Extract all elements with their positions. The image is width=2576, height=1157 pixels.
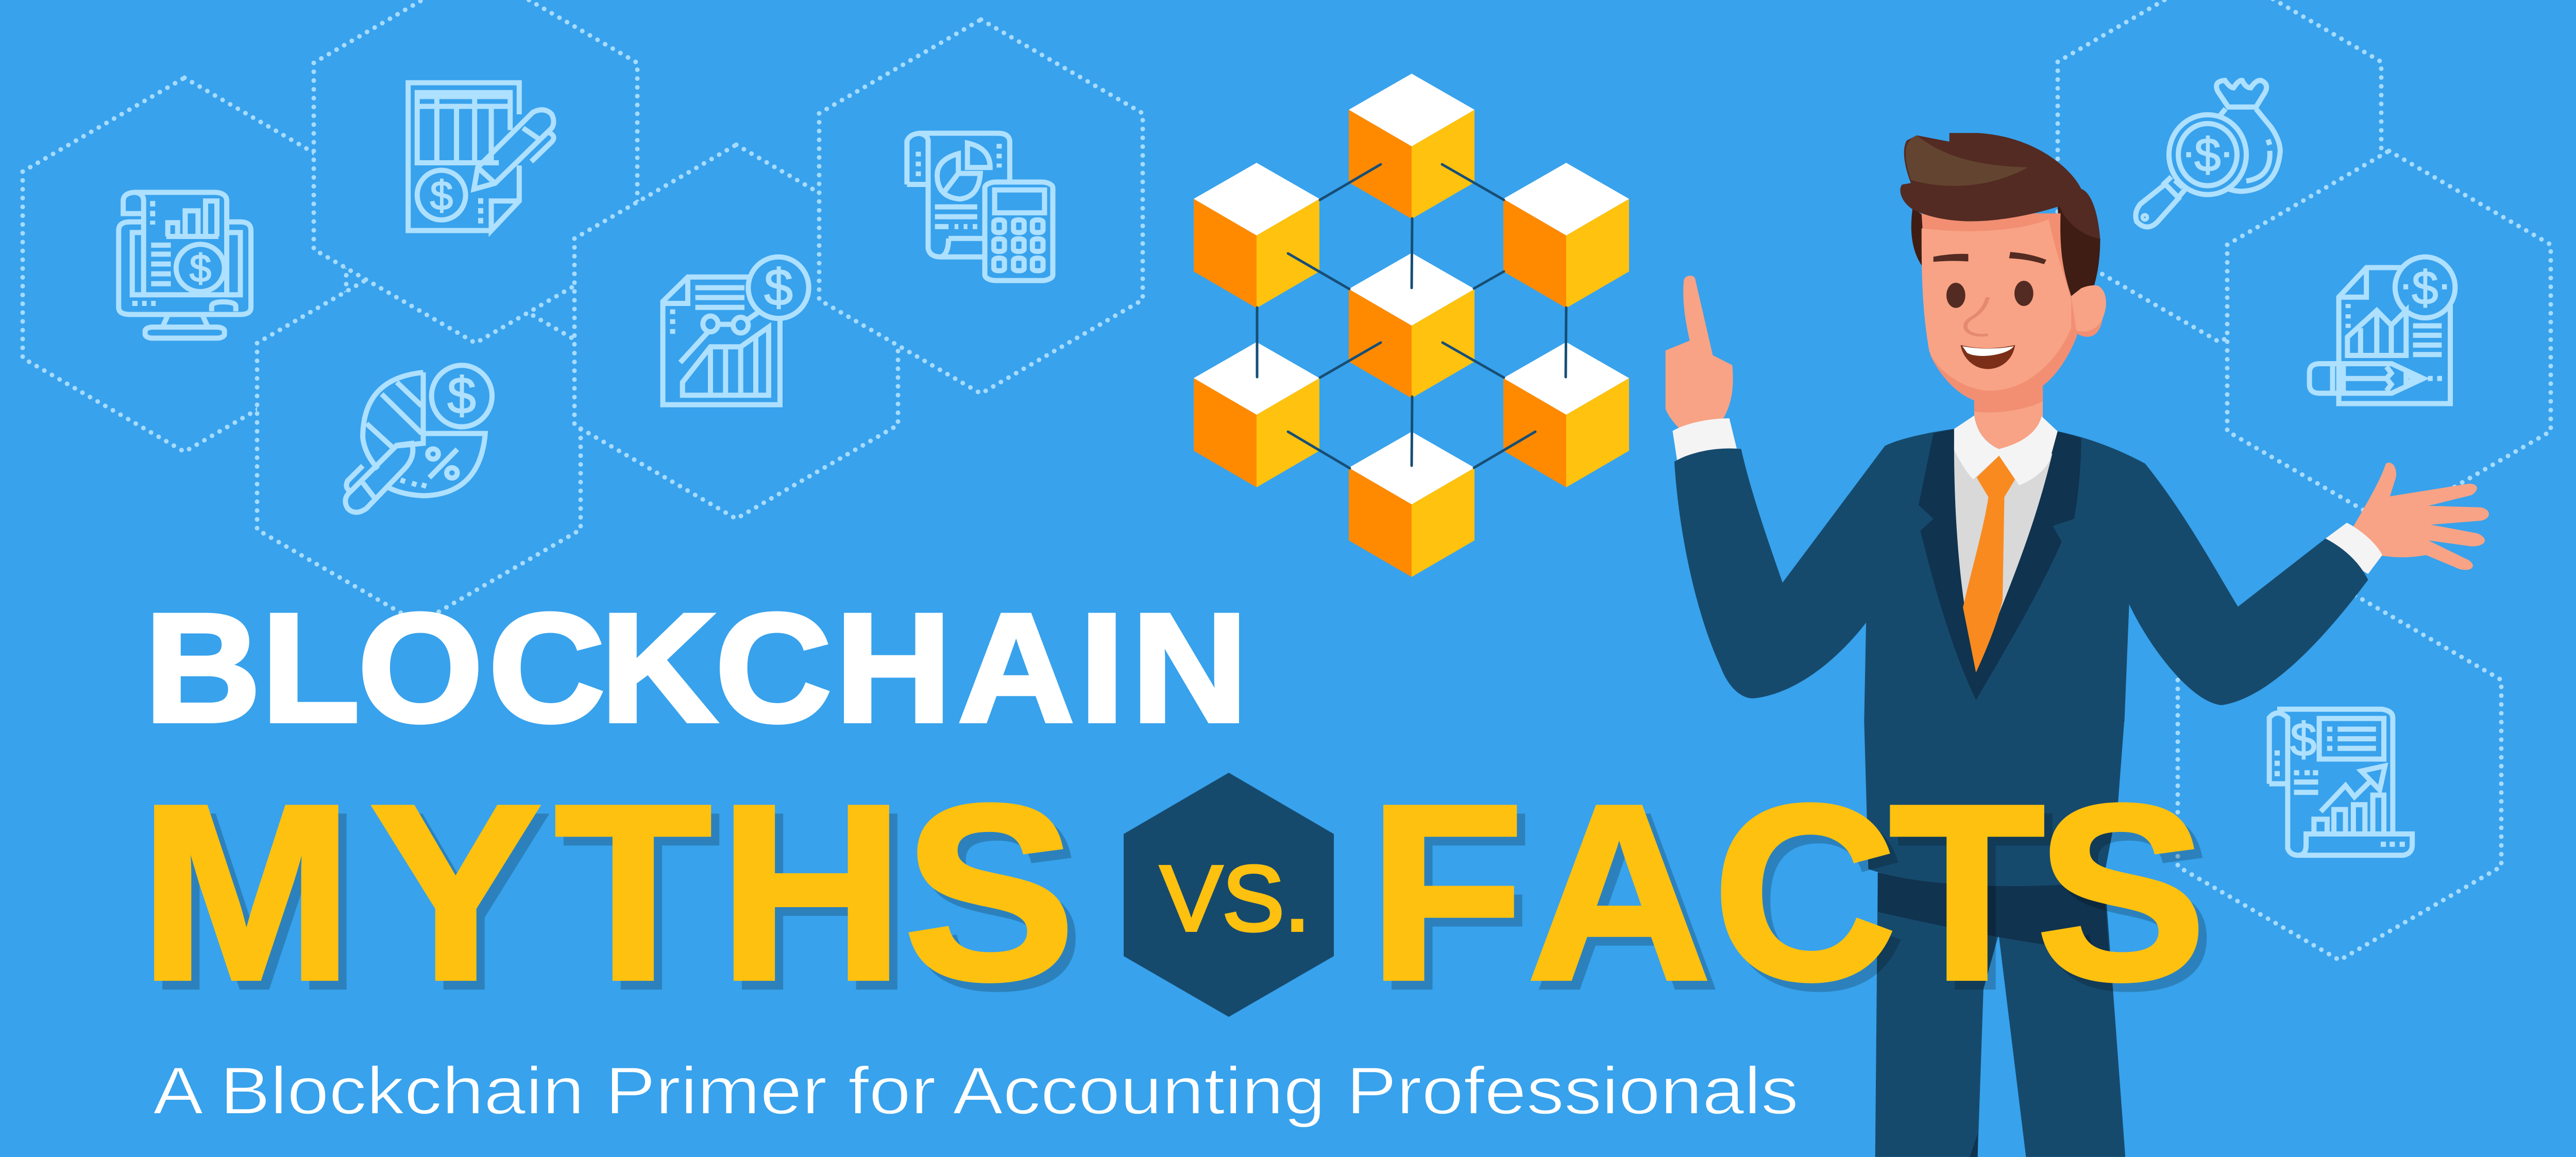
upper body, head and hands	[1666, 133, 2489, 722]
shirt	[1954, 446, 2052, 672]
face	[1922, 219, 2071, 390]
badge: vs. hexagon: VS.	[1160, 847, 1310, 950]
suit jacket	[1674, 429, 2368, 722]
icon: scroll with growth chart	[2269, 709, 2412, 855]
icon: report with line and bar chart	[663, 257, 809, 405]
left shirt cuff	[1672, 418, 1737, 462]
icon: report with pencil: $	[2412, 262, 2438, 314]
icon: pie chart report and calculator	[907, 133, 1053, 281]
jacket lapels	[1919, 429, 2081, 700]
icon: monitor with financial report	[118, 192, 251, 338]
title: MYTHS: MYTHS	[139, 753, 1075, 1032]
title: FACTS: FACTS	[1368, 753, 2206, 1032]
icon: monitor with financial report: $	[190, 247, 211, 291]
icon: spreadsheet and pen: $	[430, 173, 453, 218]
blockchain cube network	[1194, 74, 1629, 577]
icon: spreadsheet and pen	[408, 83, 554, 231]
title: BLOCKCHAIN: BLOCKCHAIN	[145, 581, 1248, 754]
pointing hand	[1666, 276, 1733, 428]
businessman character	[1666, 133, 2489, 1157]
back hair	[1911, 194, 2100, 296]
icon: pie chart with percent and pen: $	[447, 367, 476, 424]
trousers and jacket hem	[1864, 615, 2128, 1157]
ear	[2070, 312, 2103, 337]
open hand	[2345, 463, 2489, 570]
icon: report with pencil	[2310, 257, 2455, 404]
necktie	[1963, 456, 2015, 672]
icon: pie chart with percent and pen	[345, 365, 492, 512]
face shadow	[1922, 213, 2077, 402]
cubes	[1194, 74, 1629, 577]
icon: money bag and magnifier: $	[2194, 129, 2221, 181]
icon: money bag and magnifier	[2136, 80, 2280, 227]
badge: vs. hexagon	[1124, 773, 1334, 1017]
neck	[1974, 387, 2043, 449]
nose	[1965, 297, 1988, 335]
shirt collar	[1954, 416, 2058, 485]
hair highlight	[1906, 135, 2028, 186]
icon: report with line and bar chart: $	[764, 259, 793, 316]
mouth	[1961, 345, 2015, 369]
subtitle: A Blockchain Primer for Accounting Professionals	[153, 1053, 1799, 1128]
hair	[1900, 133, 2100, 239]
icon: scroll with growth chart: $	[2290, 713, 2317, 766]
eyebrows	[1934, 252, 2046, 264]
connecting links	[1257, 164, 1566, 468]
right shirt cuff	[2326, 523, 2382, 574]
eyes	[1946, 281, 2033, 308]
